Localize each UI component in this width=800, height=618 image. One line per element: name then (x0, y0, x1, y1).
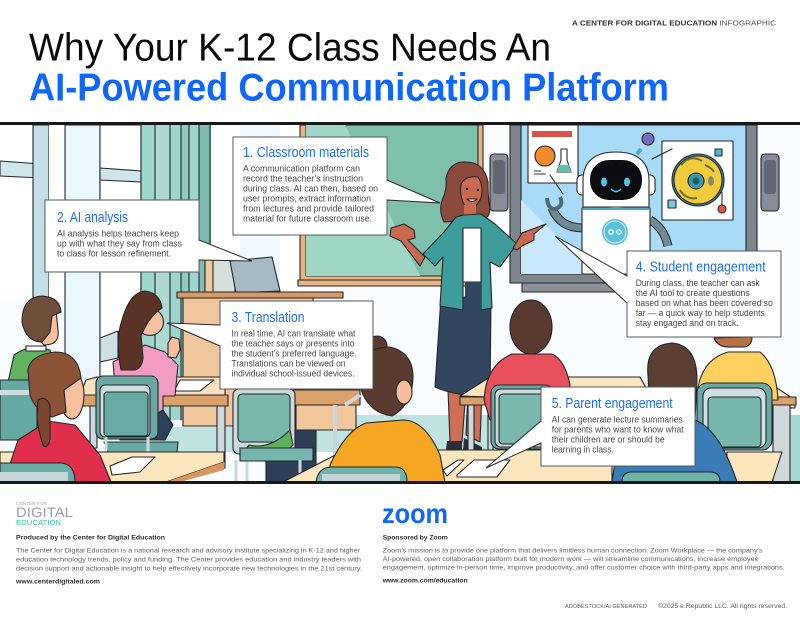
sponsor text block: www.zoom.com/education (382, 577, 468, 584)
producer text block: Produced by the Center for Digital Education (16, 534, 165, 542)
windows and wall (0, 125, 300, 395)
callout 2: AI analysis: to class for lesson refinement. (57, 248, 171, 258)
sponsor text block: engagement, optimize in-person time, improve productivity, and offer customer choice with third-party apps and integrations. (383, 565, 785, 572)
callout 3: translation: individual school-issued devices. (232, 368, 354, 378)
classroom illustration (0, 122, 800, 484)
student in red, back row (484, 300, 570, 449)
title: AI-Powered Communication Platform (29, 66, 669, 110)
callout 1: classroom materials: during class. AI can then, based on (243, 184, 378, 194)
left poster (528, 125, 578, 194)
callout 3: translation: the teacher says or presents into (232, 338, 354, 348)
front desk center-right (283, 450, 612, 482)
logo: Center for Digital Education: CENTER FOR (16, 501, 48, 506)
callout 4: student engagement: based on what has been covered so (636, 298, 773, 308)
bottom rule (0, 481, 800, 484)
callout 5: parent engagement: their children are or should be (552, 434, 665, 444)
curtains (141, 125, 211, 420)
top rule (0, 122, 800, 125)
callout 4: student engagement: stay engaged and on track. (636, 318, 739, 328)
seated student with green shirt and chair (233, 389, 360, 482)
copyright: ©2025 e.Republic LLC. All rights reserved. (658, 602, 787, 610)
callout 5: parent engagement: learning in class. (552, 444, 614, 454)
callout 3: translation: In real time, AI can translate what (232, 328, 356, 338)
header tagline: A CENTER FOR DIGITAL EDUCATION INFOGRAPHIC (572, 20, 776, 28)
logo: Center for Digital Education (16, 501, 73, 527)
producer text block: education technology trends, policy and funding. The Center provides education and industry leaders with (16, 556, 361, 564)
callout 2: AI analysis: 2. AI analysis (57, 210, 128, 226)
producer text block (15, 534, 362, 586)
pupils at left: left chair (0, 380, 37, 440)
callout 2: AI analysis (45, 200, 252, 272)
girl in pink (96, 291, 180, 452)
callout 1: classroom materials (233, 137, 440, 235)
callout 1: classroom materials: 1. Classroom materials (243, 145, 369, 161)
logo: Center for Digital Education: EDUCATION (16, 518, 61, 527)
title (29, 26, 669, 110)
callout 1: classroom materials: A communication platform can (243, 164, 360, 174)
callout 1: classroom materials: from lectures and provide tailored (243, 204, 374, 214)
tan desk, left (80, 377, 228, 468)
student in blue, right (612, 343, 782, 482)
producer text block: decision support and actionable insight to help effectively incorporate new technologies in the 21st century. (16, 566, 362, 573)
girl in red with braid (0, 352, 111, 482)
callout 4: student engagement (555, 236, 781, 337)
callout 4: student engagement: the AI tool to create questions (636, 288, 750, 298)
right poster: cell diagram (652, 141, 733, 220)
callout 5: parent engagement: AI can generate lecture summaries (552, 414, 683, 424)
callout 5: parent engagement: for parents who want to know what (552, 424, 684, 434)
callout 3: translation: Translations can be viewed on (232, 358, 346, 368)
speakers (490, 154, 779, 211)
pupils at left: boy in green (8, 296, 61, 386)
callout 2: AI analysis: up with what they say from class (57, 238, 182, 248)
chalkboard (298, 125, 483, 286)
interactive display (510, 125, 757, 292)
callout 3: translation (167, 301, 373, 389)
sponsor text block (382, 534, 785, 584)
teacher (390, 162, 546, 450)
callout 1: classroom materials: material for future classroom use. (243, 214, 372, 224)
callout 4: student engagement: far — a quick way to help students (636, 308, 765, 318)
logo: Zoom: zoom (382, 498, 448, 529)
callout 4: student engagement: During class, the teacher can ask (636, 278, 760, 288)
logo: Center for Digital Education: DIGITAL (16, 504, 73, 520)
sponsor text block: AI-powered, open collaboration platform built for modern work — will streamline communications, increase employee (383, 556, 759, 563)
callout 1: classroom materials: user prompts, extract information (243, 194, 371, 204)
back row desk center (460, 377, 650, 450)
callout 5: parent engagement (486, 387, 695, 468)
callout 3: translation: the student’s preferred language. (232, 348, 356, 358)
callout 4: student engagement: 4. Student engagement (636, 260, 766, 276)
sponsor text block: Zoom’s mission is to provide one platform that delivers limitless human connection. Zoom Workplace — the company’s (383, 547, 763, 554)
producer text block: The Center for Digital Education is a national research and advisory institute specializing in K-12 and higher (16, 547, 361, 554)
image credit: ADOBESTOCK/AI GENERATED (565, 604, 647, 610)
student with bun in orange sweater (316, 336, 445, 482)
robot (547, 133, 668, 274)
floor (160, 415, 560, 452)
front desk, left (0, 452, 224, 482)
callout 2: AI analysis: AI analysis helps teachers keep (57, 228, 179, 238)
student in yellow, back row right (697, 337, 800, 483)
callout 1: classroom materials: record the teacher’s instruction (243, 174, 363, 184)
callout 3: translation: 3. Translation (232, 310, 304, 326)
producer text block: www.centerdigitaled.com (15, 579, 100, 586)
callout 5: parent engagement: 5. Parent engagement (552, 396, 673, 412)
sponsor text block: Sponsored by Zoom (383, 534, 448, 542)
teacher desk with books and laptop (177, 257, 343, 426)
title: Why Your K-12 Class Needs An (29, 26, 551, 70)
